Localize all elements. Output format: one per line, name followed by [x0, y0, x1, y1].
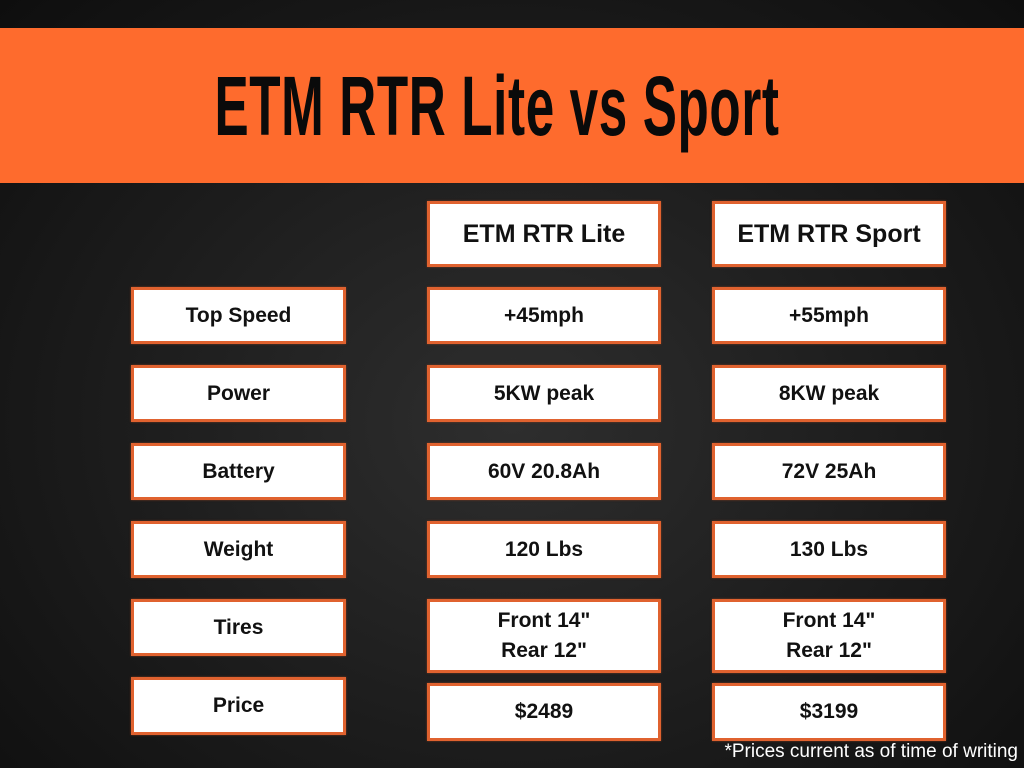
- lite tires: Rear 12": [501, 639, 587, 662]
- row: tires: Tires: [214, 616, 263, 638]
- lite top speed: +45mph: [504, 304, 584, 326]
- sport battery: 72V 25Ah: [782, 460, 876, 482]
- lite battery: 60V 20.8Ah: [488, 460, 600, 482]
- header: sport: ETM RTR Sport: [737, 220, 921, 248]
- sport top speed: +55mph: [789, 304, 869, 326]
- header: lite: ETM RTR Lite: [463, 220, 625, 248]
- sport weight: 130 Lbs: [790, 538, 868, 560]
- row: price: Price: [213, 694, 264, 717]
- row: tires: [131, 599, 346, 656]
- lite top speed: [427, 287, 661, 344]
- row: battery: [131, 443, 346, 500]
- row: power: [131, 365, 346, 422]
- sport tires: Front 14": [783, 609, 875, 632]
- row: battery: Battery: [202, 460, 275, 482]
- row: price: [131, 677, 346, 735]
- sport price: $3199: [800, 700, 858, 723]
- lite tires: [427, 599, 661, 673]
- footnote: *Prices current as of time of writing: [724, 741, 1018, 762]
- lite battery: [427, 443, 661, 500]
- lite weight: 120 Lbs: [505, 538, 583, 560]
- lite price: $2489: [515, 700, 573, 723]
- sport power: 8KW peak: [779, 382, 879, 404]
- title: ETM RTR Lite vs Sport: [214, 59, 780, 153]
- lite weight: [427, 521, 661, 578]
- row: top speed: Top Speed: [186, 304, 291, 326]
- sport power: [712, 365, 946, 422]
- row: top speed: [131, 287, 346, 344]
- row: power: Power: [207, 382, 270, 404]
- header: lite: [427, 201, 661, 267]
- sport battery: [712, 443, 946, 500]
- row: weight: [131, 521, 346, 578]
- row: weight: Weight: [204, 538, 273, 560]
- sport weight: [712, 521, 946, 578]
- lite power: [427, 365, 661, 422]
- sport top speed: [712, 287, 946, 344]
- header: sport: [712, 201, 946, 267]
- sport tires: [712, 599, 946, 673]
- lite price: [427, 683, 661, 741]
- title banner: [0, 28, 1024, 183]
- sport tires: Rear 12": [786, 639, 872, 662]
- sport price: [712, 683, 946, 741]
- lite tires: Front 14": [498, 609, 590, 632]
- lite power: 5KW peak: [494, 382, 594, 404]
